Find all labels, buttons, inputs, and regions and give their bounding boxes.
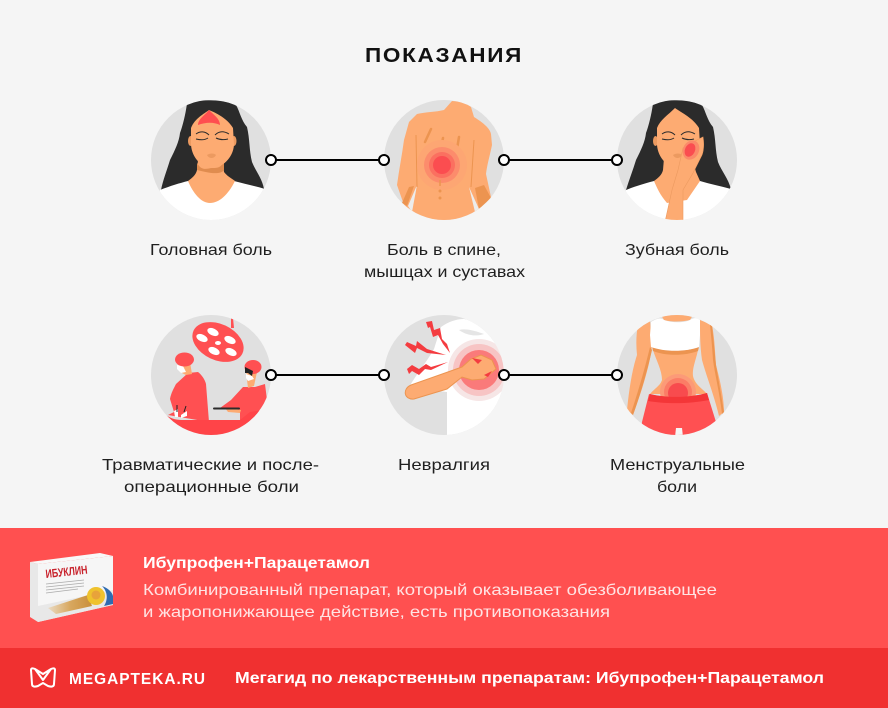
drug description: Комбинированный препарат, который оказывает обезболивающее bbox=[143, 582, 717, 599]
icon: headache woman bbox=[150, 100, 275, 225]
icon: surgeons bbox=[150, 314, 275, 440]
footer caption: Мегагид по лекарственным препаратам: Ибупрофен+Парацетамол bbox=[235, 670, 824, 687]
neck bbox=[661, 315, 693, 322]
label: back, muscle and joint pain: Боль в спине, bbox=[387, 242, 501, 259]
drug name: Ибупрофен+Парацетамол bbox=[143, 555, 370, 572]
product box: ИБУКЛИН bbox=[45, 563, 88, 581]
pain rings bbox=[448, 339, 504, 401]
pain rings bbox=[440, 140, 459, 150]
label: back, muscle and joint pain bbox=[364, 242, 525, 281]
operating lamp bbox=[192, 318, 244, 362]
shorts bbox=[642, 393, 716, 435]
icon: logo bbox=[31, 668, 55, 687]
top bbox=[650, 318, 700, 351]
icon: back pain bbox=[384, 100, 504, 222]
footer band bbox=[0, 648, 888, 708]
icon: toothache woman bbox=[616, 100, 741, 225]
drug description bbox=[143, 582, 717, 621]
label: menstrual pain: боли bbox=[657, 479, 697, 496]
label: menstrual pain bbox=[610, 457, 745, 496]
pain rings bbox=[660, 374, 696, 396]
drug description: и жаропонижающее действие, есть противопоказания bbox=[143, 604, 610, 621]
panel: drug info bbox=[0, 528, 888, 648]
connector: back pain to toothache bbox=[499, 155, 622, 165]
icon: neuralgia bbox=[384, 315, 510, 440]
product box bbox=[30, 553, 113, 622]
arm and hand bbox=[405, 355, 496, 399]
label: toothache: Зубная боль bbox=[625, 242, 729, 259]
arms bbox=[627, 320, 652, 415]
title: ПОКАЗАНИЯ bbox=[365, 45, 523, 67]
label: back, muscle and joint pain: мышцах и суставах bbox=[364, 264, 525, 281]
connector: surgery to neuralgia bbox=[266, 370, 389, 380]
icon: menstrual pain bbox=[617, 315, 737, 440]
nerve bolts bbox=[426, 321, 450, 353]
label: traumatic and post-operative pain bbox=[102, 457, 319, 496]
hand and arm on cheek bbox=[665, 137, 704, 222]
connector: neuralgia to menstrual pain bbox=[499, 370, 622, 380]
connector: headache to back pain bbox=[266, 155, 389, 165]
cheek pain bbox=[682, 140, 700, 160]
label: traumatic and post-operative pain: Травматические и после- bbox=[102, 457, 319, 474]
tray bbox=[213, 408, 240, 410]
label: traumatic and post-operative pain: операционные боли bbox=[124, 479, 299, 496]
torso bbox=[650, 350, 707, 394]
label: headache: Головная боль bbox=[150, 242, 272, 259]
label: menstrual pain: Менструальные bbox=[610, 457, 745, 474]
right surgeon bbox=[220, 360, 267, 426]
left surgeon bbox=[168, 352, 209, 422]
table bbox=[167, 410, 260, 435]
label: neuralgia: Невралгия bbox=[398, 457, 490, 474]
brand name: MEGAPTEKA.RU bbox=[69, 671, 206, 688]
